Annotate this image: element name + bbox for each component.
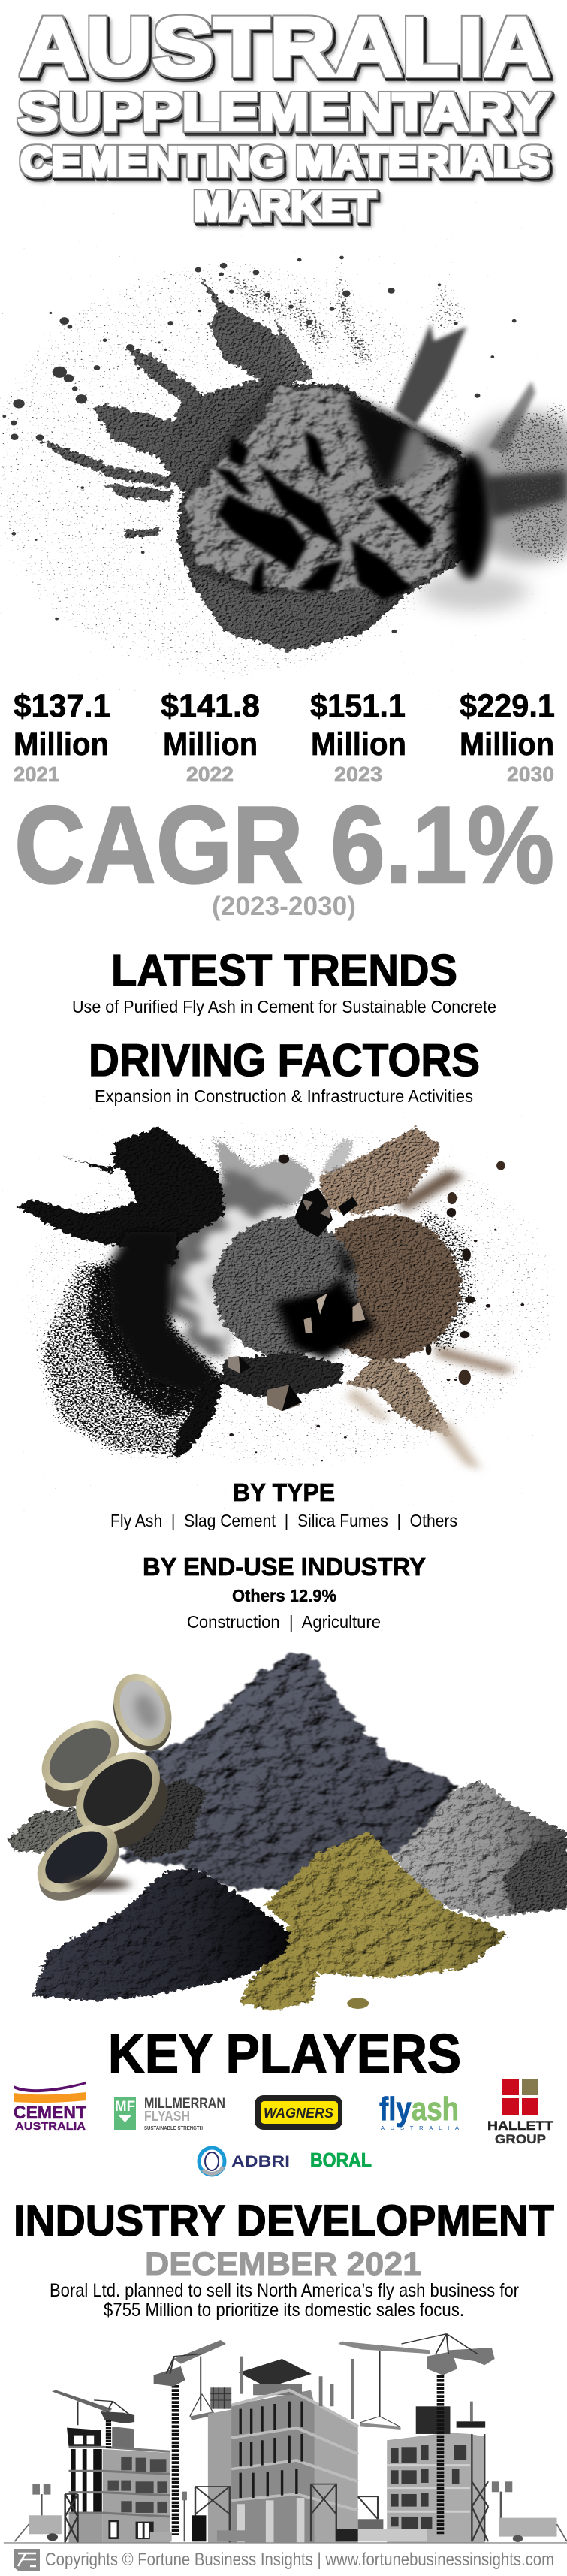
stat: 2030 [460, 688, 555, 786]
logo: Boral: BORAL [310, 2149, 372, 2171]
heading: by type: BY TYPE [233, 1478, 335, 1506]
heading: latest trends: LATEST TRENDS [111, 946, 457, 995]
logo: Adbri: ADBRI [231, 2153, 290, 2170]
illustration: construction site with cranes [4, 2334, 567, 2544]
stat: 2023: 2023 [334, 763, 382, 786]
light towers and site trailers [14, 2481, 567, 2542]
logo: Millmerran Flyash: MF [115, 2099, 135, 2115]
stat: 2022: $141.8 [161, 688, 260, 724]
logo: Millmerran Flyash: FLYASH [144, 2109, 190, 2124]
logo: Millmerran Flyash: MILLMERRAN [144, 2096, 225, 2112]
latest trends text: Use of Purified Fly Ash in Cement for Sustainable Concrete [72, 997, 496, 1016]
image: powder piles and bowls [8, 1653, 567, 2011]
stat: 2022: Million [163, 726, 258, 763]
logo: Flyash Australia: flyash [379, 2091, 459, 2128]
heading: driving factors: DRIVING FACTORS [89, 1035, 480, 1086]
left building [65, 2427, 170, 2543]
driving factors text: Expansion in Construction & Infrastructure Activities [95, 1086, 473, 1106]
centre building [182, 2357, 378, 2543]
logo: Cement Australia: CEMENT [14, 2103, 86, 2123]
logo: Millmerran Flyash [114, 2096, 225, 2131]
type list: Fly Ash | Slag Cement | Silica Fumes | Others [110, 1511, 457, 1530]
development text: $755 Million to prioritize its domestic sales focus. [104, 2300, 464, 2321]
stat: 2021: Million [14, 726, 109, 763]
logo: Wagners: WAGNERS [264, 2106, 333, 2121]
title [18, 1, 550, 229]
bowl: grey powder [23, 1706, 140, 1820]
heading: industry development: INDUSTRY DEVELOPMENT [14, 2197, 554, 2245]
right crane [338, 2334, 495, 2430]
hero image: exploding dark powder [0, 255, 567, 678]
title: SUPPLEMENTARY [18, 83, 550, 141]
bowl: black powder [23, 1810, 134, 1914]
heading: key players: KEY PLAYERS [108, 2024, 461, 2085]
stat: 2021: $137.1 [14, 688, 110, 724]
development date: DECEMBER 2021 [145, 2246, 421, 2282]
title: AUSTRALIA [20, 1, 550, 93]
stat: 2023: $151.1 [310, 688, 406, 724]
footer: logo mark [14, 2549, 40, 2571]
right building [387, 2375, 488, 2543]
end-use list: Construction | Agriculture [187, 1612, 381, 1632]
stat: 2023 [310, 688, 406, 786]
stat: 2022: 2022 [186, 763, 234, 786]
logo: Hallett Group: GROUP [495, 2132, 546, 2146]
bowl: dark powder [58, 1735, 188, 1865]
logo: Millmerran Flyash: SUSTAINABLE STRENGTH [144, 2126, 203, 2131]
logo: Cement Australia [14, 2082, 86, 2133]
title: MARKET [194, 183, 375, 229]
logo: Wagners [255, 2095, 342, 2130]
centre crane [154, 2340, 226, 2535]
stat: 2021: 2021 [14, 763, 59, 786]
end-use share: Others 12.9% [232, 1586, 336, 1605]
heading: by end-use industry: BY END-USE INDUSTRY [143, 1553, 426, 1581]
logo: Flyash Australia: AUSTRALIA [381, 2125, 459, 2131]
stat: 2021 [14, 688, 110, 786]
bowl: light powder [101, 1665, 184, 1760]
logo: Cement Australia: AUSTRALIA [15, 2120, 86, 2133]
development text [50, 2280, 519, 2321]
stat: 2023: Million [311, 726, 406, 763]
CAGR period: (2023-2030) [212, 892, 356, 921]
stat: 2030: 2030 [507, 763, 554, 786]
image: mixed black, grey and brown powder burst [18, 1127, 557, 1470]
title: CEMENTING MATERIALS [20, 139, 549, 184]
stat: 2030: $229.1 [460, 688, 555, 724]
logo: Hallett Group: HALLETT [487, 2118, 554, 2133]
stat: 2030: Million [460, 726, 554, 763]
logo: Adbri [199, 2148, 290, 2175]
left crane [52, 2390, 134, 2448]
stat: 2022 [161, 688, 260, 786]
logo: Hallett Group [487, 2079, 554, 2146]
